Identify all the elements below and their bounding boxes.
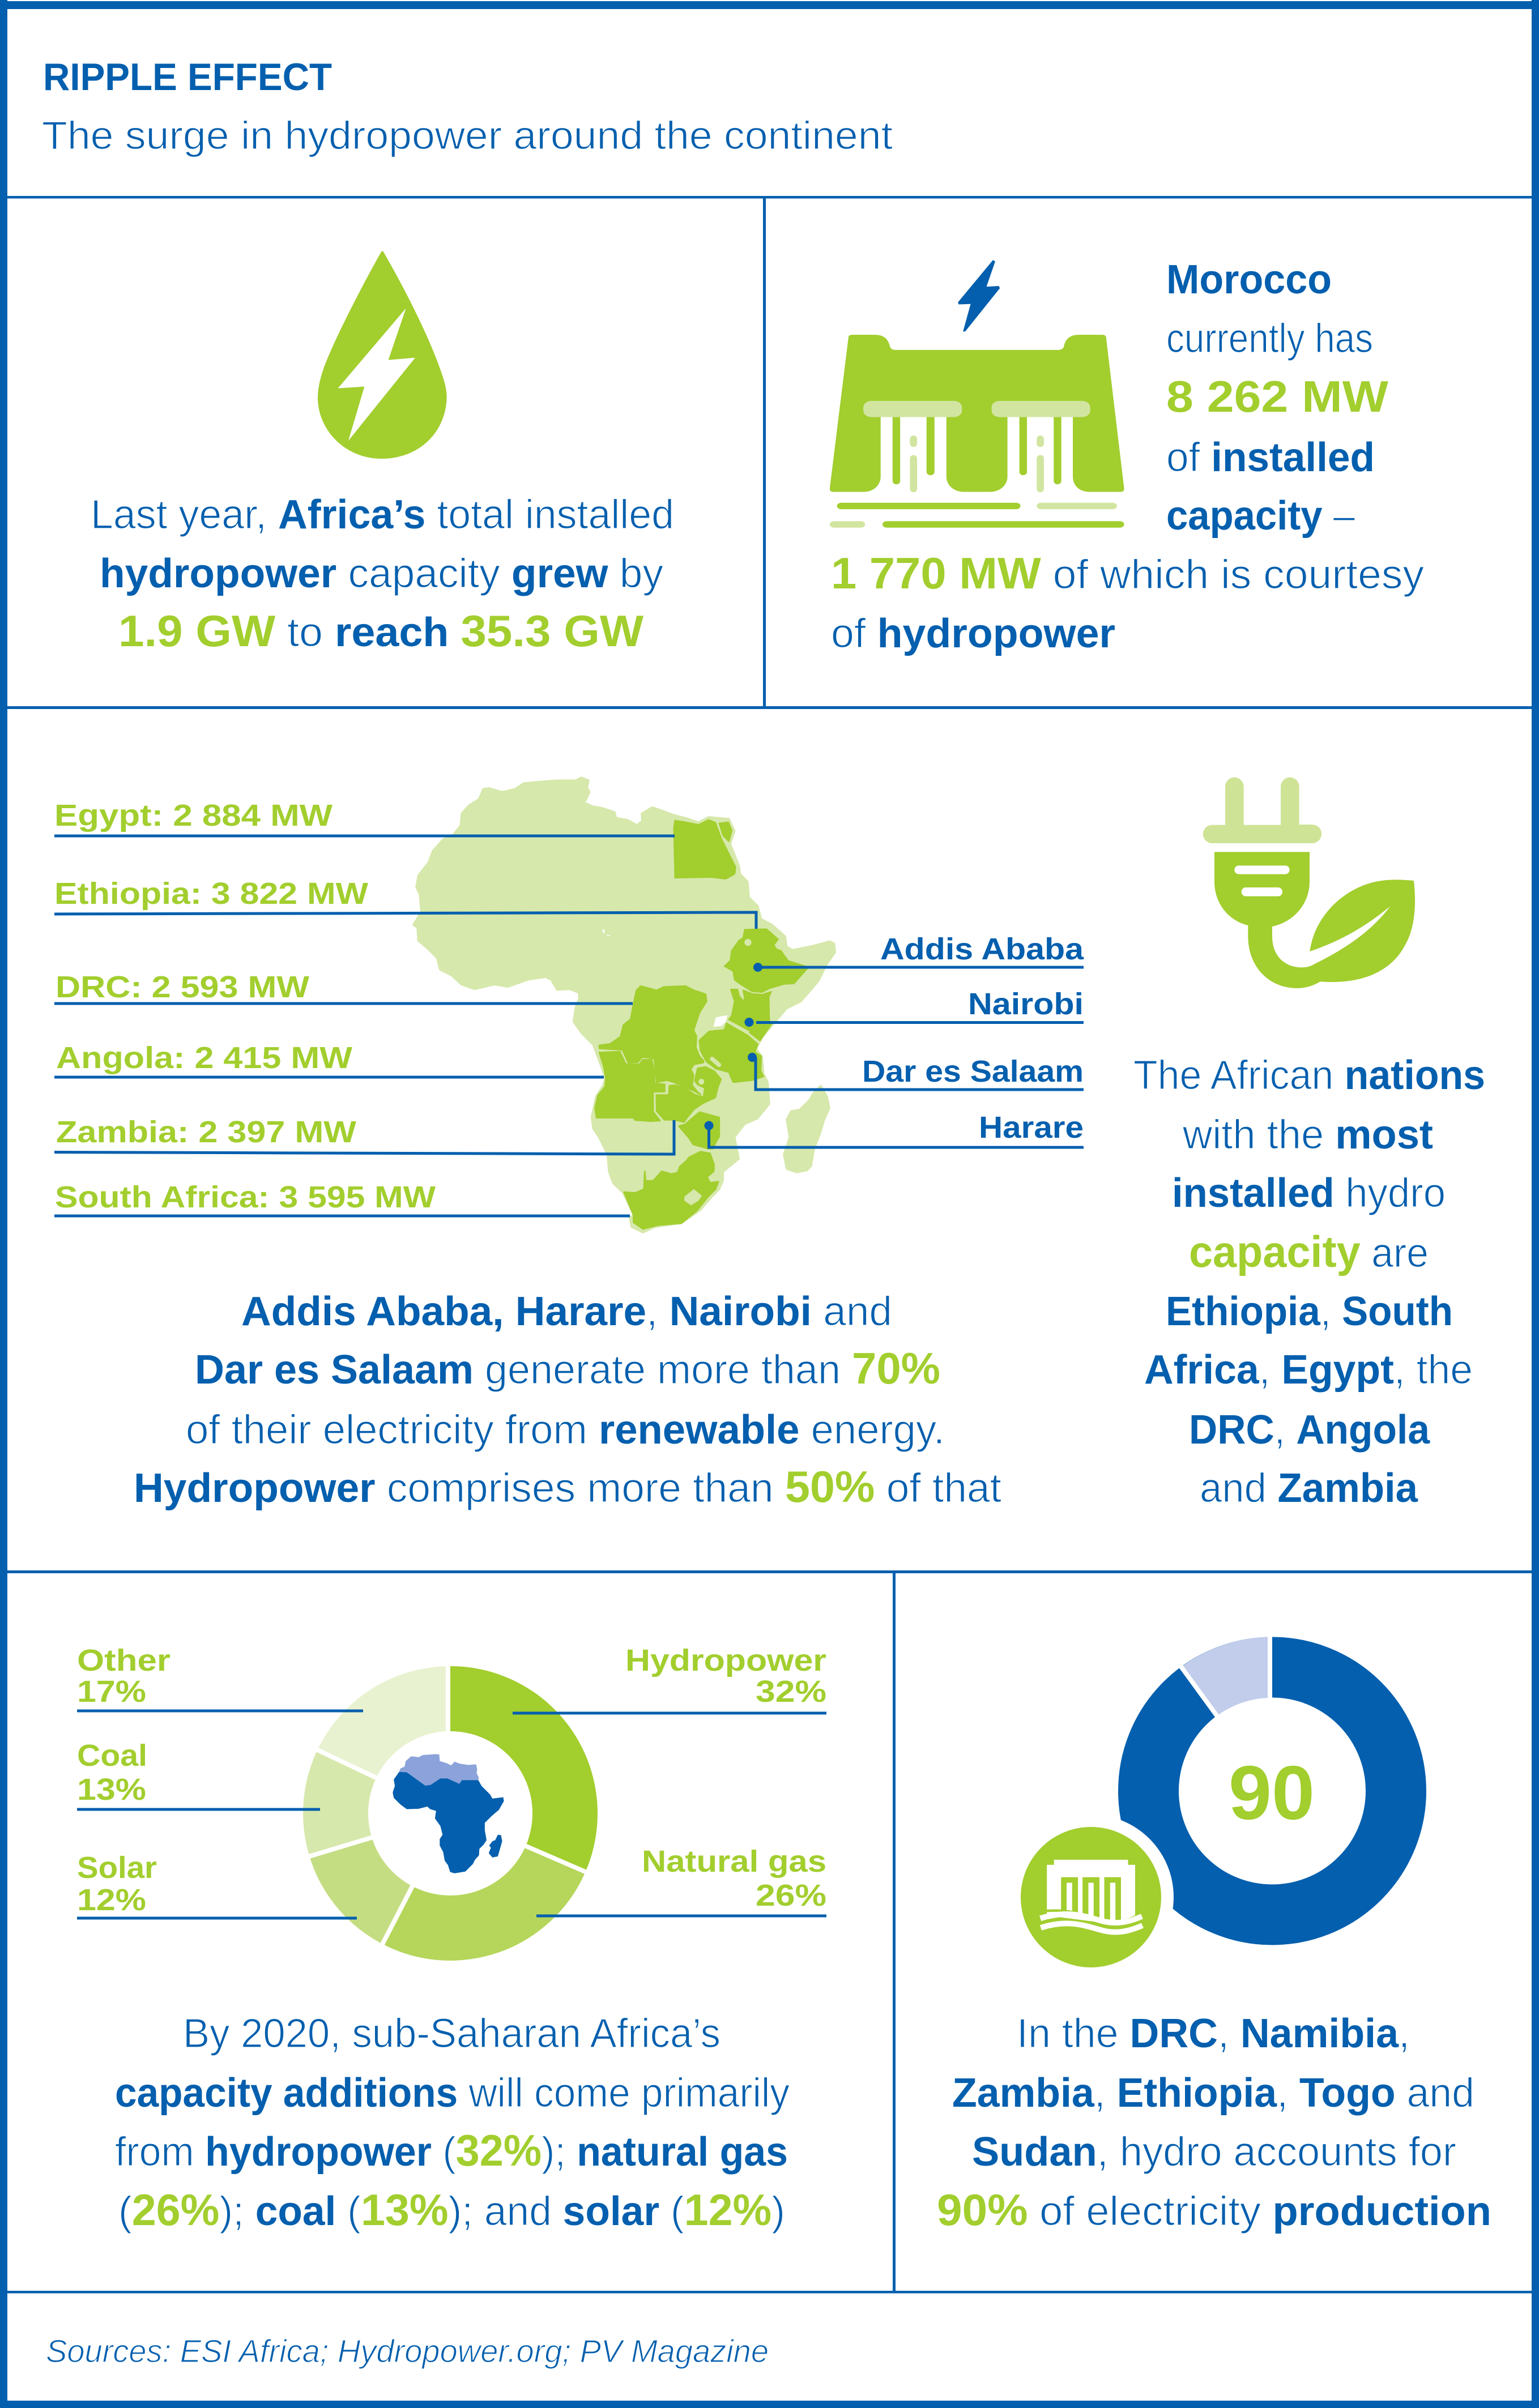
city labels: Dar es Salaam <box>862 1054 1084 1088</box>
text: renewable share: Dar es Salaam generate more than 70% <box>195 1343 940 1393</box>
text: renewable share: Addis Ababa, Harare, Nairobi and <box>241 1289 892 1334</box>
donut labels: Hydropower <box>625 1643 826 1677</box>
city labels: Nairobi <box>968 987 1084 1021</box>
text: capacity additions: capacity additions will come primarily <box>115 2070 790 2116</box>
text: most installed capacity: The African nations <box>1133 1053 1485 1098</box>
icon: dam with lightning bolt <box>830 260 1124 528</box>
country labels: Angola: 2 415 MW <box>56 1041 352 1075</box>
icon: water drop with lightning <box>318 251 447 459</box>
text: Morocco capacity: capacity – <box>1166 493 1355 539</box>
donut labels: Other <box>77 1643 170 1677</box>
donut labels: Coal <box>77 1739 147 1773</box>
city markers <box>705 963 762 1130</box>
text: hydro accounts for 90%: 90% of electricity production <box>937 2185 1491 2235</box>
country labels: Ethiopia: 3 822 MW <box>54 877 368 911</box>
text: capacity additions: (26%); coal (13%); and solar (12%) <box>118 2185 785 2235</box>
text: renewable share: of their electricity from renewable energy. <box>186 1407 945 1453</box>
city labels: Harare <box>979 1111 1084 1145</box>
donut labels <box>77 1643 826 1917</box>
text: most installed capacity: DRC, Angola <box>1189 1407 1430 1453</box>
city labels: Addis Ababa <box>880 932 1084 966</box>
text: Morocco capacity: of installed <box>1166 435 1375 480</box>
icon: power station badge <box>1008 1814 1174 1980</box>
text: total installed capacity: Last year, Africa’s total installed <box>91 492 674 537</box>
text: capacity additions: By 2020, sub-Saharan Africa’s <box>183 2011 721 2056</box>
leader lines: countries <box>54 836 1084 1216</box>
text: Morocco capacity: Morocco <box>1166 257 1332 302</box>
donut labels: 32% <box>756 1675 826 1709</box>
donut labels: Solar <box>77 1851 157 1885</box>
text: most installed capacity: capacity are <box>1189 1227 1429 1276</box>
subheading: The surge in hydropower around the continent <box>42 113 893 157</box>
text: most installed capacity: installed hydro <box>1172 1171 1446 1216</box>
sources footer: Sources: ESI Africa; Hydropower.org; PV Magazine <box>46 2333 769 2369</box>
country labels: South Africa: 3 595 MW <box>55 1180 436 1214</box>
text: total installed capacity: hydropower capacity grew by <box>100 551 663 596</box>
text: capacity additions: from hydropower (32%); natural gas <box>115 2125 788 2175</box>
text: Morocco capacity <box>831 257 1424 656</box>
icon: small Africa map <box>393 1754 504 1873</box>
text: most installed capacity: Ethiopia, South <box>1166 1289 1453 1334</box>
text: total installed capacity: 1.9 GW to reach 35.3 GW <box>118 606 643 656</box>
map: Africa with highlighted countries <box>413 778 835 1232</box>
icon: plug with leaf <box>1203 778 1415 988</box>
heading: RIPPLE EFFECT <box>43 55 332 99</box>
country labels: Zambia: 2 397 MW <box>56 1115 356 1149</box>
city labels <box>862 932 1084 1145</box>
text: hydro accounts for 90% <box>937 2011 1491 2235</box>
donut chart: 90 percent <box>1149 1634 1396 1915</box>
donut labels: 17% <box>77 1675 146 1709</box>
donut labels: 13% <box>77 1773 146 1807</box>
panel: map of Africa <box>54 778 1485 1512</box>
donut labels: Natural gas <box>642 1845 826 1878</box>
leader lines: donut <box>77 1711 826 1918</box>
text: Morocco capacity: 1 770 MW of which is courtesy <box>831 548 1424 598</box>
country labels <box>54 799 436 1214</box>
text: Morocco capacity: currently has <box>1166 316 1373 361</box>
text: renewable share <box>134 1289 1001 1512</box>
text: most installed capacity: Africa, Egypt, the <box>1144 1347 1473 1393</box>
text: hydro accounts for 90%: In the DRC, Namibia, <box>1017 2011 1410 2056</box>
text: Morocco capacity: 8 262 MW <box>1166 372 1388 421</box>
title block <box>42 55 893 157</box>
text: total installed capacity <box>91 492 674 656</box>
text: hydro accounts for 90%: Zambia, Ethiopia, Togo and <box>952 2070 1474 2116</box>
text: most installed capacity: and Zambia <box>1200 1466 1418 1511</box>
country labels: Egypt: 2 884 MW <box>54 799 332 832</box>
text: renewable share: Hydropower comprises more than 50% of that <box>134 1462 1001 1512</box>
panel: Africa total capacity <box>91 251 674 656</box>
text: Morocco capacity: of hydropower <box>831 611 1115 656</box>
donut labels: 12% <box>77 1883 146 1917</box>
country labels: DRC: 2 593 MW <box>56 970 309 1004</box>
text: most installed capacity <box>1133 1053 1485 1511</box>
donut labels: 26% <box>756 1878 826 1912</box>
donut chart: capacity additions by source <box>303 1662 598 1961</box>
text: hydro accounts for 90%: Sudan, hydro accounts for <box>972 2129 1456 2175</box>
value: 90 <box>1229 1750 1315 1835</box>
panel: capacity additions <box>77 1643 826 2235</box>
text: most installed capacity: with the most <box>1182 1112 1433 1158</box>
panel: Morocco <box>830 257 1424 656</box>
text: capacity additions <box>115 2011 790 2235</box>
panel: 90 percent hydro <box>937 1634 1491 2235</box>
